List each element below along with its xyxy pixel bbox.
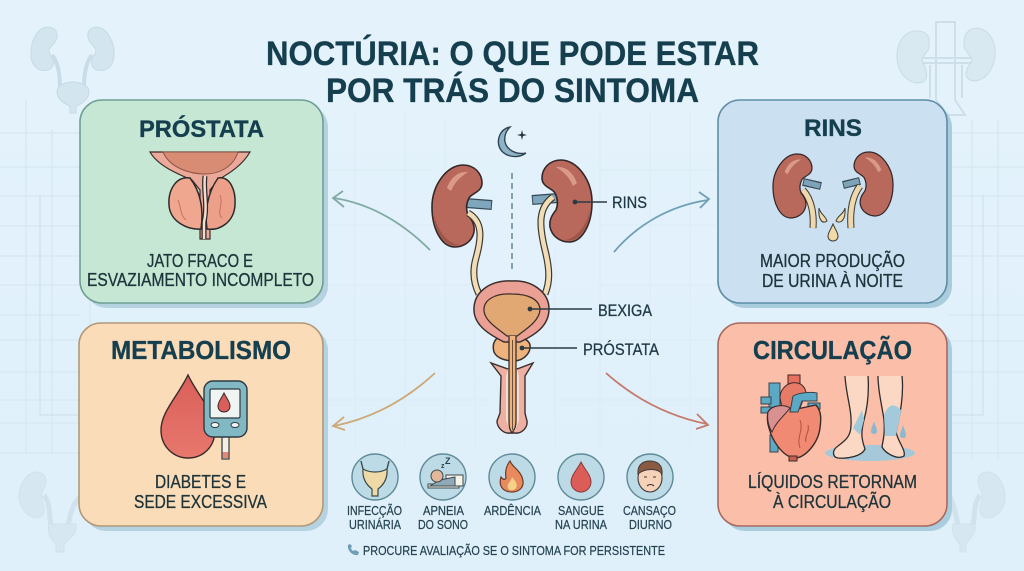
panel: metabolismo [79,323,328,531]
title: POR TRÁS DO SINTOMA [326,70,699,110]
symptom: infecção urinária: INFECÇÃO [347,504,402,518]
heading: circulação: CIRCULAÇÃO [753,335,912,365]
text: próstata description: JATO FRACO E [147,251,253,271]
prostate [493,337,530,361]
symptom: apneia do sono: z [441,463,445,470]
heading: próstata: PRÓSTATA [139,115,264,143]
call to action: PROCURE AVALIAÇÃO SE O SINTOMA FOR PERSISTENTE [363,544,665,558]
icon: moon and star [498,127,527,157]
text: metabolismo description: DIABETES E [155,472,246,492]
text: metabolismo description: SEDE EXCESSIVA [134,492,267,512]
symptom: sangue na urina: SANGUE [558,504,604,518]
panel: próstata [80,100,328,308]
text: circulação description: À CIRCULAÇÃO [773,491,891,512]
text: rins description: MAIOR PRODUÇÃO [760,250,905,271]
icon: phone [348,544,359,555]
arrow: centre to metabolismo [333,373,435,430]
symptom: cansaço diurno: DIURNO [629,518,672,532]
heading: rins: RINS [804,115,862,142]
label: próstata: PRÓSTATA [583,340,660,359]
label: bexiga: BEXIGA [598,301,653,320]
text: próstata description [87,251,314,290]
symptom: cansaço diurno: CANSAÇO [623,504,676,518]
watermark: kidneys and vessels top right [897,22,995,115]
panel: circulação [718,323,952,531]
icon: prostate [150,152,250,239]
title: NOCTÚRIA: O QUE PODE ESTAR [266,33,759,73]
icon: blood drop [161,375,215,458]
text: próstata description: ESVAZIAMENTO INCOMPLETO [87,270,314,290]
text: circulação description: LÍQUIDOS RETORNAM [748,472,917,492]
label: rins [573,193,647,212]
label: bexiga [528,301,653,320]
watermark: urinary system bottom right [950,472,1005,552]
label: rins: RINS [612,193,647,212]
icon: kidneys with drops [773,152,893,241]
symptom: apneia do sono: APNEIA [423,504,465,518]
symptom: apneia do sono: Z [445,456,451,466]
symptom: cansaço diurno [623,454,676,532]
left kidney [432,165,492,247]
icon: swollen legs [825,376,915,461]
central anatomy diagram [432,160,660,433]
icon: glucose meter [204,381,247,459]
symptom: infecção urinária: URINÁRIA [349,517,402,532]
symptom: sangue na urina: NA URINA [555,518,608,532]
heading: metabolismo: METABOLISMO [111,335,291,365]
watermark: urinary system top left [31,27,114,113]
bladder [474,281,549,342]
arrow: centre to rins [614,192,709,252]
symptom: apneia do sono: DO SONO [418,518,468,532]
panel: rins [718,100,952,308]
text: rins description [760,250,905,291]
symptom: sangue na urina [555,454,608,532]
watermark: urinary system bottom left [19,472,80,552]
arrow: centre to circulação [606,373,708,429]
symptom: ardência [484,454,542,518]
symptom: ardência: ARDÊNCIA [484,503,542,518]
right kidney [532,160,592,242]
penis and urethra [491,336,533,433]
icon: heart [761,375,821,461]
ureters [468,197,553,294]
symptom: infecção urinária [347,454,402,532]
text: metabolismo description [134,472,267,512]
label: próstata [520,340,660,359]
symptom: apneia do sono [418,454,468,532]
text: rins description: DE URINA À NOITE [762,271,903,291]
text: circulação description [748,472,917,512]
title [266,33,759,110]
arrow: centre to próstata [333,191,430,250]
